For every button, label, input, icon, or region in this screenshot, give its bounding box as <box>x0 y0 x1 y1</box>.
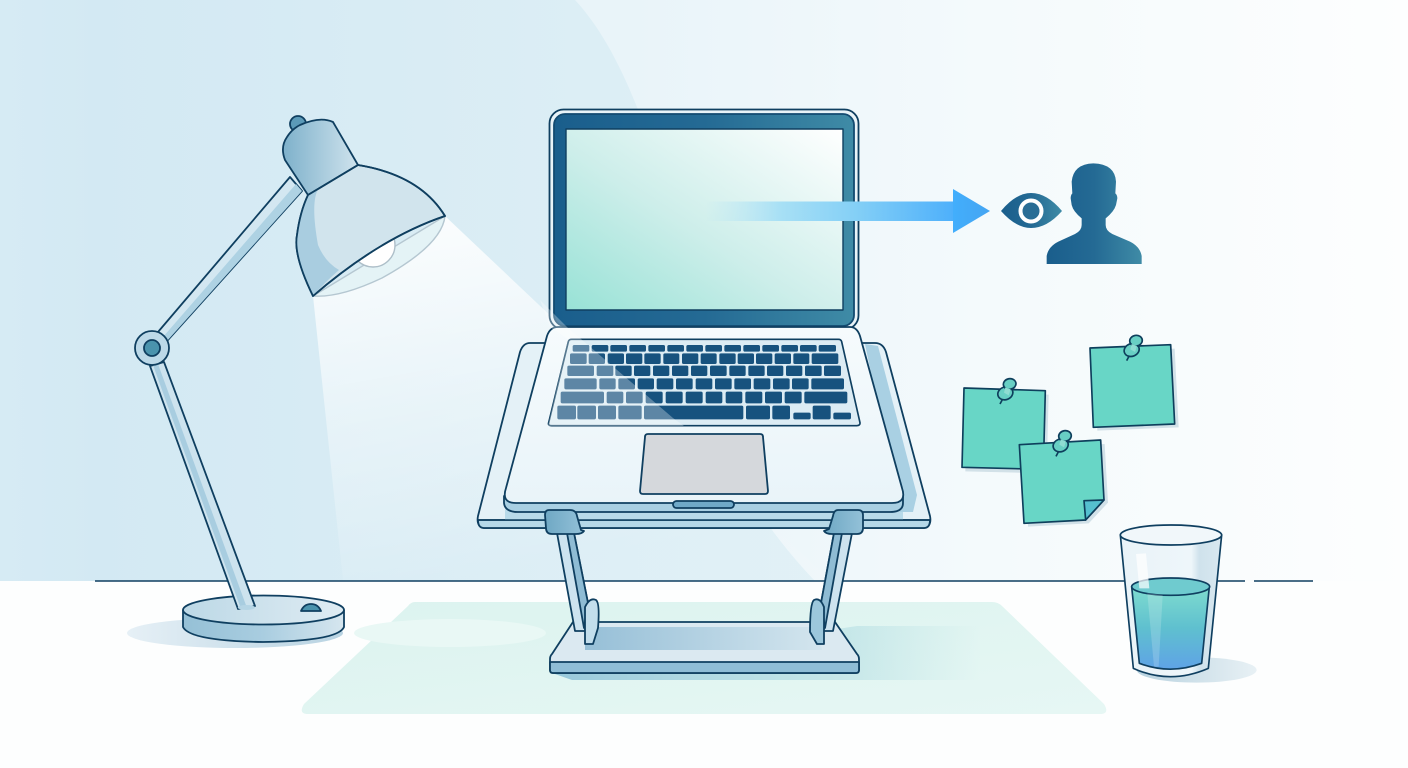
note: bottom with curled corner <box>1019 430 1108 527</box>
water <box>1132 578 1210 669</box>
pin <box>996 378 1017 404</box>
laptop hinge <box>595 326 813 333</box>
keyboard keys <box>557 345 851 419</box>
water highlight <box>1147 593 1163 667</box>
laptop stand <box>477 343 980 680</box>
laptop <box>504 110 903 534</box>
glass highlight <box>1136 553 1149 588</box>
keyboard <box>548 339 860 426</box>
stand base shadow <box>552 626 980 680</box>
trackpad <box>640 434 768 494</box>
arrow head <box>953 189 990 233</box>
laptop deck <box>505 327 903 503</box>
sticky notes <box>962 334 1179 527</box>
laptop screen <box>566 129 843 310</box>
laptop front notch <box>673 501 734 508</box>
lamp bulb <box>351 223 395 267</box>
lamp base shadow <box>127 618 343 648</box>
pin <box>1051 430 1072 456</box>
desk line <box>95 580 1313 582</box>
stand top plate <box>477 343 931 528</box>
stand left clip <box>545 510 584 534</box>
lamp shade <box>296 165 445 296</box>
icon: eye <box>1001 193 1062 228</box>
stand left hinge <box>585 599 599 644</box>
glass of water <box>1120 525 1257 683</box>
arrow shaft <box>705 202 953 221</box>
glass body <box>1120 535 1222 677</box>
laptop lid <box>550 110 858 330</box>
note: left <box>962 378 1049 473</box>
note: top right <box>1090 334 1179 431</box>
gaze arrow <box>705 189 990 233</box>
lamp lower arm <box>150 362 255 610</box>
mat highlight <box>354 619 546 647</box>
lamp light beam <box>313 216 830 580</box>
beam overlay on laptop <box>540 300 684 426</box>
lamp joint <box>135 331 169 365</box>
glass rim <box>1120 525 1222 545</box>
pin <box>1122 334 1143 361</box>
desk surface <box>0 581 1408 768</box>
lamp upper arm <box>158 177 302 341</box>
stand left leg <box>557 533 588 631</box>
stand right leg <box>821 533 852 631</box>
lamp knob <box>290 116 306 132</box>
laptop deck lip <box>504 496 903 512</box>
glass shadow <box>1137 657 1257 683</box>
lamp base button <box>301 604 321 611</box>
icon: person <box>1047 163 1142 264</box>
background large curved shape <box>0 0 815 581</box>
stand right hinge <box>810 599 824 644</box>
curled corner <box>1084 500 1104 520</box>
lamp cap <box>283 120 358 195</box>
stand base <box>550 622 859 673</box>
desk mat <box>302 602 1106 714</box>
stand right clip <box>824 510 863 534</box>
lamp opening <box>313 216 445 296</box>
laptop bezel <box>554 114 854 326</box>
lamp base <box>183 596 344 642</box>
background wall <box>0 0 1408 581</box>
desk lamp <box>127 116 445 648</box>
